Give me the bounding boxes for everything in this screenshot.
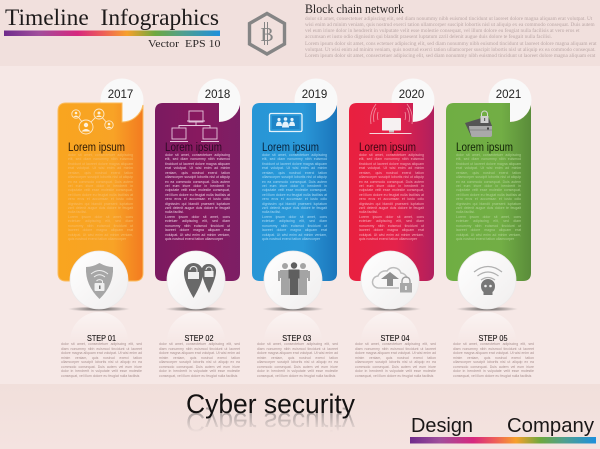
panel: step 05 2021 green: STEP 05 [478,333,508,343]
rainbow bar [4,30,220,36]
heading: block chain network: Block chain network [305,2,405,16]
panel: step 03 2019 blue: STEP 03 [282,333,311,343]
intro paragraph: wisi enim ad minim veniam, quis nostrud exerci tation ullamcorper suscipit lobortis nisl ut aliquip ex ea commodo consequat. Duis autem [305,22,595,28]
intro paragraph: dolor sit amet, consectetuer adipiscing elit, sed diam nonummy nibh euismod tincidunt ut laoreet dolore magna aliquam erat volutpat. Ut [305,16,592,22]
text: dolor sit amet, consectetuer adipiscing elit, sed diam nonummy nibh euismod tincidunt ut laoreet dolore magna aliquam erat volutpat. Ut wisi enim ad minim veniam, quis nostrud exerci tation ullamcorper suscipit lobortis nisl ut aliquip ex ea commodo consequat. Duis autem vel eum iriure dolor in hendrerit in vulputate velit esse molestie consequat, vel illum dolore eu feugiat nulla facilisis [61,342,142,378]
intro paragraph: accumsan et iusto odio dignissim qui blandit praesent luptatum zzril delenit augue duis dolore te feugait nulla facilisi. [305,34,552,40]
panel: step 05 2021 green [446,78,534,378]
panel: step 01 2017 orange [58,78,144,378]
footer brand: design company: Design [411,414,473,437]
panel: step 03 2019 blue: dolor sit amet, consectetuer adipiscing elit, sed diam nonummy nibh euismod tincidunt ut laoreet dolore magna aliquam erat volutpat. Ut wisi enim ad minim veniam, quis nostrud exerci tation ullamcorper suscipit lobortis nisl ut aliquip ex ea commodo consequat. Duis autem vel eum iriure dolor in hendrerit in vulputate velit esse molestie consequat, vel illum dolore eu feugiat nulla facilisis at vero eros et accumsan et iusto odio dignissim qui blandit praesent luptatum zzril delenit augue duis dolore te feugait nulla facilisi. [262,153,327,214]
footer title: cyber security with reflection: Cyber security [186,389,356,419]
panel: step 03 2019 blue: 2019 [302,89,327,101]
panel: step 02 2018 purple: Lorem ipsum dolor sit amet, cons ectetuer adipiscing elit, sed diam nonummy nibh euismod tincidunt ut laoreet dolore magna aliquam erat volutpat. Ut wisi enim ad minim veniam, quis nostrud exerci tation ullamcorper [165,215,230,241]
intro paragraph: vel eum iriure dolor in hendrerit in vulputate velit esse molestie consequat, vel illum dolore eu feugiat nulla facilisis at vero eros et [305,28,580,34]
panel: step 04 2020 red: STEP 04 [380,333,410,343]
panel: step 01 2017 orange: 2017 [108,89,133,101]
icon: bitcoin hexagon [248,12,286,56]
intro paragraph: Lorem ipsum dolor sit amet, cons ectetuer adipiscing elit, sed diam nonummy nibh euismod tincidunt ut laoreet dolore magna aliquam erat [305,41,597,47]
footer title: cyber security with reflection: Cyber security [186,407,356,437]
text: dolor sit amet, consectetuer adipiscing elit, sed diam nonummy nibh euismod tincidunt ut laoreet dolore magna aliquam erat volutpat. Ut wisi enim ad minim veniam, quis nostrud exerci tation ullamcorper suscipit lobortis nisl ut aliquip ex ea commodo consequat. Duis autem vel eum iriure dolor in hendrerit in vulputate velit esse molestie consequat, vel illum dolore eu feugiat nulla facilisis [257,342,338,378]
title block [4,5,221,50]
panel: step 04 2020 red: 2020 [399,89,424,101]
footer title: cyber security with reflection [186,389,356,437]
panel: step 05 2021 green: Lorem ipsum dolor sit amet, cons ectetuer adipiscing elit, sed diam nonummy nibh euismod tincidunt ut laoreet dolore magna aliquam erat volutpat. Ut wisi enim ad minim veniam, quis nostrud exerci tation ullamcorper [456,215,521,241]
panel: step 01 2017 orange: STEP 01 [87,333,116,343]
panel: step 04 2020 red: dolor sit amet, consectetuer adipiscing elit, sed diam nonummy nibh euismod tincidunt ut laoreet dolore magna aliquam erat volutpat. Ut wisi enim ad minim veniam, quis nostrud exerci tation ullamcorper suscipit lobortis nisl ut aliquip ex ea commodo consequat. Duis autem vel eum iriure dolor in hendrerit in vulputate velit esse molestie consequat, vel illum dolore eu feugiat nulla facilisis at vero eros et accumsan et iusto odio dignissim qui blandit praesent luptatum zzril delenit augue duis dolore te feugait nulla facilisi. [359,153,424,214]
icon: bitcoin hexagon: B [260,24,274,46]
panel: step 04 2020 red [349,78,436,378]
panel: step 02 2018 purple [155,78,240,378]
footer brand: design company [410,414,596,444]
panel: step 02 2018 purple: Lorem ipsum [165,142,222,154]
intro paragraph: volutpat. Ut wisi enim ad minim veniam, quis nostrud exerci tation ullamcorper suscipit lobortis nisl ut aliquip ex ea commodo consequat. [305,47,596,53]
panel: step 03 2019 blue: Lorem ipsum [262,142,319,154]
panel: step 01 2017 orange: Lorem ipsum dolor sit amet, cons ectetuer adipiscing elit, sed diam nonummy nibh euismod tincidunt ut laoreet dolore magna aliquam erat volutpat. Ut wisi enim ad minim veniam, quis nostrud exerci tation ullamcorper [68,215,133,241]
subtitle: Vector EPS 10 [148,38,221,50]
panel: step 01 2017 orange: dolor sit amet, consectetuer adipiscing elit, sed diam nonummy nibh euismod tincidunt ut laoreet dolore magna aliquam erat volutpat. Ut wisi enim ad minim veniam, quis nostrud exerci tation ullamcorper suscipit lobortis nisl ut aliquip ex ea commodo consequat. Duis autem vel eum iriure dolor in hendrerit in vulputate velit esse molestie consequat, vel illum dolore eu feugiat nulla facilisis at vero eros et accumsan et iusto odio dignissim qui blandit praesent luptatum zzril delenit augue duis dolore te feugait nulla facilisi. [68,153,133,214]
header band [0,0,600,66]
panel: step 04 2020 red: Lorem ipsum [359,142,416,154]
title: Timeline Infographics [5,5,219,30]
panel: step 02 2018 purple: dolor sit amet, consectetuer adipiscing elit, sed diam nonummy nibh euismod tincidunt ut laoreet dolore magna aliquam erat volutpat. Ut wisi enim ad minim veniam, quis nostrud exerci tation ullamcorper suscipit lobortis nisl ut aliquip ex ea commodo consequat. Duis autem vel eum iriure dolor in hendrerit in vulputate velit esse molestie consequat, vel illum dolore eu feugiat nulla facilisis at vero eros et accumsan et iusto odio dignissim qui blandit praesent luptatum zzril delenit augue duis dolore te feugait nulla facilisi. [165,153,230,214]
text: dolor sit amet, consectetuer adipiscing elit, sed diam nonummy nibh euismod tincidunt ut laoreet dolore magna aliquam erat volutpat. Ut wisi enim ad minim veniam, quis nostrud exerci tation ullamcorper suscipit lobortis nisl ut aliquip ex ea commodo consequat. Duis autem vel eum iriure dolor in hendrerit in vulputate velit esse molestie consequat, vel illum dolore eu feugiat nulla facilisis [355,342,436,378]
footer band [0,384,600,449]
panel: step 02 2018 purple: 2018 [205,89,230,101]
text: dolor sit amet, consectetuer adipiscing elit, sed diam nonummy nibh euismod tincidunt ut laoreet dolore magna aliquam erat volutpat. Ut wisi enim ad minim veniam, quis nostrud exerci tation ullamcorper suscipit lobortis nisl ut aliquip ex ea commodo consequat. Duis autem vel eum iriure dolor in hendrerit in vulputate velit esse molestie consequat, vel illum dolore eu feugiat nulla facilisis [159,342,240,378]
panel: step 03 2019 blue [252,78,338,378]
intro paragraph: Lorem ipsum dolor sit amet, consectetuer adipiscing elit, sed diam nonummy nibh euismod tincidunt ut laoreet dolore magna aliquam erat [305,53,595,59]
panel: step 05 2021 green: 2021 [496,89,521,101]
panel: step 04 2020 red: Lorem ipsum dolor sit amet, cons ectetuer adipiscing elit, sed diam nonummy nibh euismod tincidunt ut laoreet dolore magna aliquam erat volutpat. Ut wisi enim ad minim veniam, quis nostrud exerci tation ullamcorper [359,215,424,241]
text: dolor sit amet, consectetuer adipiscing elit, sed diam nonummy nibh euismod tincidunt ut laoreet dolore magna aliquam erat volutpat. Ut wisi enim ad minim veniam, quis nostrud exerci tation ullamcorper suscipit lobortis nisl ut aliquip ex ea commodo consequat. Duis autem vel eum iriure dolor in hendrerit in vulputate velit esse molestie consequat, vel illum dolore eu feugiat nulla facilisis [453,342,534,378]
panel: step 01 2017 orange: Lorem ipsum [68,142,125,154]
panel: step 03 2019 blue: Lorem ipsum dolor sit amet, cons ectetuer adipiscing elit, sed diam nonummy nibh euismod tincidunt ut laoreet dolore magna aliquam erat volutpat. Ut wisi enim ad minim veniam, quis nostrud exerci tation ullamcorper [262,215,327,241]
panel: step 05 2021 green: dolor sit amet, consectetuer adipiscing elit, sed diam nonummy nibh euismod tincidunt ut laoreet dolore magna aliquam erat volutpat. Ut wisi enim ad minim veniam, quis nostrud exerci tation ullamcorper suscipit lobortis nisl ut aliquip ex ea commodo consequat. Duis autem vel eum iriure dolor in hendrerit in vulputate velit esse molestie consequat, vel illum dolore eu feugiat nulla facilisis at vero eros et accumsan et iusto odio dignissim qui blandit praesent luptatum zzril delenit augue duis dolore te feugait nulla facilisi. [456,153,521,214]
panel: step 02 2018 purple: STEP 02 [184,333,214,343]
intro paragraph [305,16,597,59]
footer brand: design company: Company [507,414,595,437]
panel: step 05 2021 green: Lorem ipsum [456,142,513,154]
